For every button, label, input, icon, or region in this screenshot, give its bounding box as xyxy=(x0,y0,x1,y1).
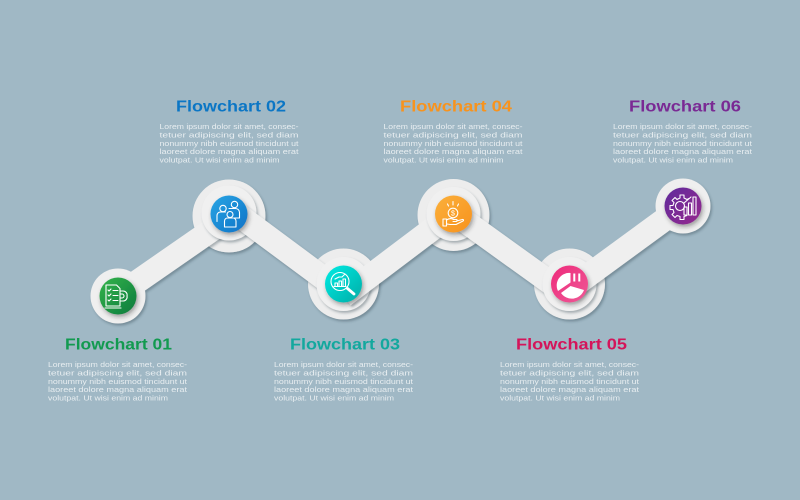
text block: Flowchart 03: nonummy nibh euismod tincidunt ut xyxy=(274,377,413,386)
node 4 outer ring xyxy=(418,179,490,251)
icon: coin over hand on orange disc xyxy=(435,196,472,232)
node 6 ring and connector from node 5 xyxy=(570,178,710,289)
text block: Flowchart 06: tetuer adipiscing elit, sed diam xyxy=(613,130,752,140)
text block: Flowchart 03 xyxy=(274,360,414,402)
node 1 ring and connector to node 2 xyxy=(90,218,229,324)
node 5 outer ring xyxy=(534,248,605,320)
text block: Flowchart 01: laoreet dolore magna aliquam erat xyxy=(48,385,187,394)
text block: Flowchart 01: tetuer adipiscing elit, sed diam xyxy=(48,368,187,378)
node 3 inner ring xyxy=(316,257,370,311)
text block: Flowchart 06: nonummy nibh euismod tincidunt ut xyxy=(613,139,752,148)
text block: Flowchart 05 xyxy=(500,360,640,402)
text block: Flowchart 01: Lorem ipsum dolor sit amet, consec- xyxy=(48,360,188,369)
text block: Flowchart 02: Lorem ipsum dolor sit amet, consec- xyxy=(160,122,299,131)
text block: Flowchart 04 xyxy=(384,122,523,164)
text block: Flowchart 02: laoreet dolore magna aliquam erat xyxy=(160,147,298,156)
heading: Flowchart 05: Flowchart 05 xyxy=(516,336,627,354)
text block: Flowchart 04: tetuer adipiscing elit, sed diam xyxy=(384,130,522,140)
text block: Flowchart 02: tetuer adipiscing elit, sed diam xyxy=(160,130,298,140)
text block: Flowchart 01 xyxy=(48,360,188,402)
icon: pie chart on pink disc xyxy=(551,266,588,302)
icon: magnifier with bar chart on teal disc xyxy=(325,266,362,302)
icon: people on blue disc xyxy=(210,196,248,232)
text block: Flowchart 02 xyxy=(160,122,299,164)
text block: Flowchart 02: volutpat. Ut wisi enim ad minim xyxy=(160,156,280,164)
text block: Flowchart 06 xyxy=(613,122,753,164)
node 4 inner ring xyxy=(426,187,480,241)
text block: Flowchart 05: Lorem ipsum dolor sit amet, consec- xyxy=(500,360,640,369)
text block: Flowchart 04: nonummy nibh euismod tincidunt ut xyxy=(384,139,522,148)
text block: Flowchart 04: Lorem ipsum dolor sit amet, consec- xyxy=(384,122,523,131)
text block: Flowchart 06: volutpat. Ut wisi enim ad minim xyxy=(613,156,733,164)
node 5 inner ring xyxy=(542,257,596,311)
connector 2 to 3 xyxy=(229,208,344,293)
text block: Flowchart 03: tetuer adipiscing elit, sed diam xyxy=(274,368,413,378)
heading: Flowchart 02: Flowchart 02 xyxy=(176,98,286,116)
text block: Flowchart 06: laoreet dolore magna aliquam erat xyxy=(613,147,752,156)
text block: Flowchart 01: nonummy nibh euismod tincidunt ut xyxy=(48,377,187,386)
icon: gear with bar chart on purple disc xyxy=(664,188,702,224)
text block: Flowchart 01: volutpat. Ut wisi enim ad minim xyxy=(48,394,168,402)
text block: Flowchart 03: Lorem ipsum dolor sit amet, consec- xyxy=(274,360,414,369)
text block: Flowchart 05: laoreet dolore magna aliquam erat xyxy=(500,385,639,394)
icon: coin over hand on orange disc: $ xyxy=(451,210,455,218)
heading: Flowchart 01: Flowchart 01 xyxy=(65,336,172,354)
text block: Flowchart 03: laoreet dolore magna aliquam erat xyxy=(274,385,413,394)
connector 3 to 4 xyxy=(344,213,454,296)
heading: Flowchart 04: Flowchart 04 xyxy=(400,98,512,116)
text block: Flowchart 04: volutpat. Ut wisi enim ad minim xyxy=(384,156,504,164)
text block: Flowchart 02: nonummy nibh euismod tincidunt ut xyxy=(160,139,298,148)
text block: Flowchart 05: volutpat. Ut wisi enim ad minim xyxy=(500,394,620,402)
text block: Flowchart 03: volutpat. Ut wisi enim ad minim xyxy=(274,394,394,402)
connector 4 to 5 xyxy=(454,213,570,296)
heading: Flowchart 06: Flowchart 06 xyxy=(629,98,741,116)
node 2 inner ring xyxy=(202,186,256,240)
text block: Flowchart 04: laoreet dolore magna aliquam erat xyxy=(384,147,522,156)
text block: Flowchart 05: tetuer adipiscing elit, sed diam xyxy=(500,368,639,378)
node 3 outer ring xyxy=(308,248,379,320)
node 2 outer ring xyxy=(192,180,266,252)
heading: Flowchart 03: Flowchart 03 xyxy=(290,336,400,354)
text block: Flowchart 05: nonummy nibh euismod tincidunt ut xyxy=(500,377,639,386)
icon: checklist document on green disc xyxy=(100,278,136,314)
text block: Flowchart 06: Lorem ipsum dolor sit amet, consec- xyxy=(613,122,753,131)
